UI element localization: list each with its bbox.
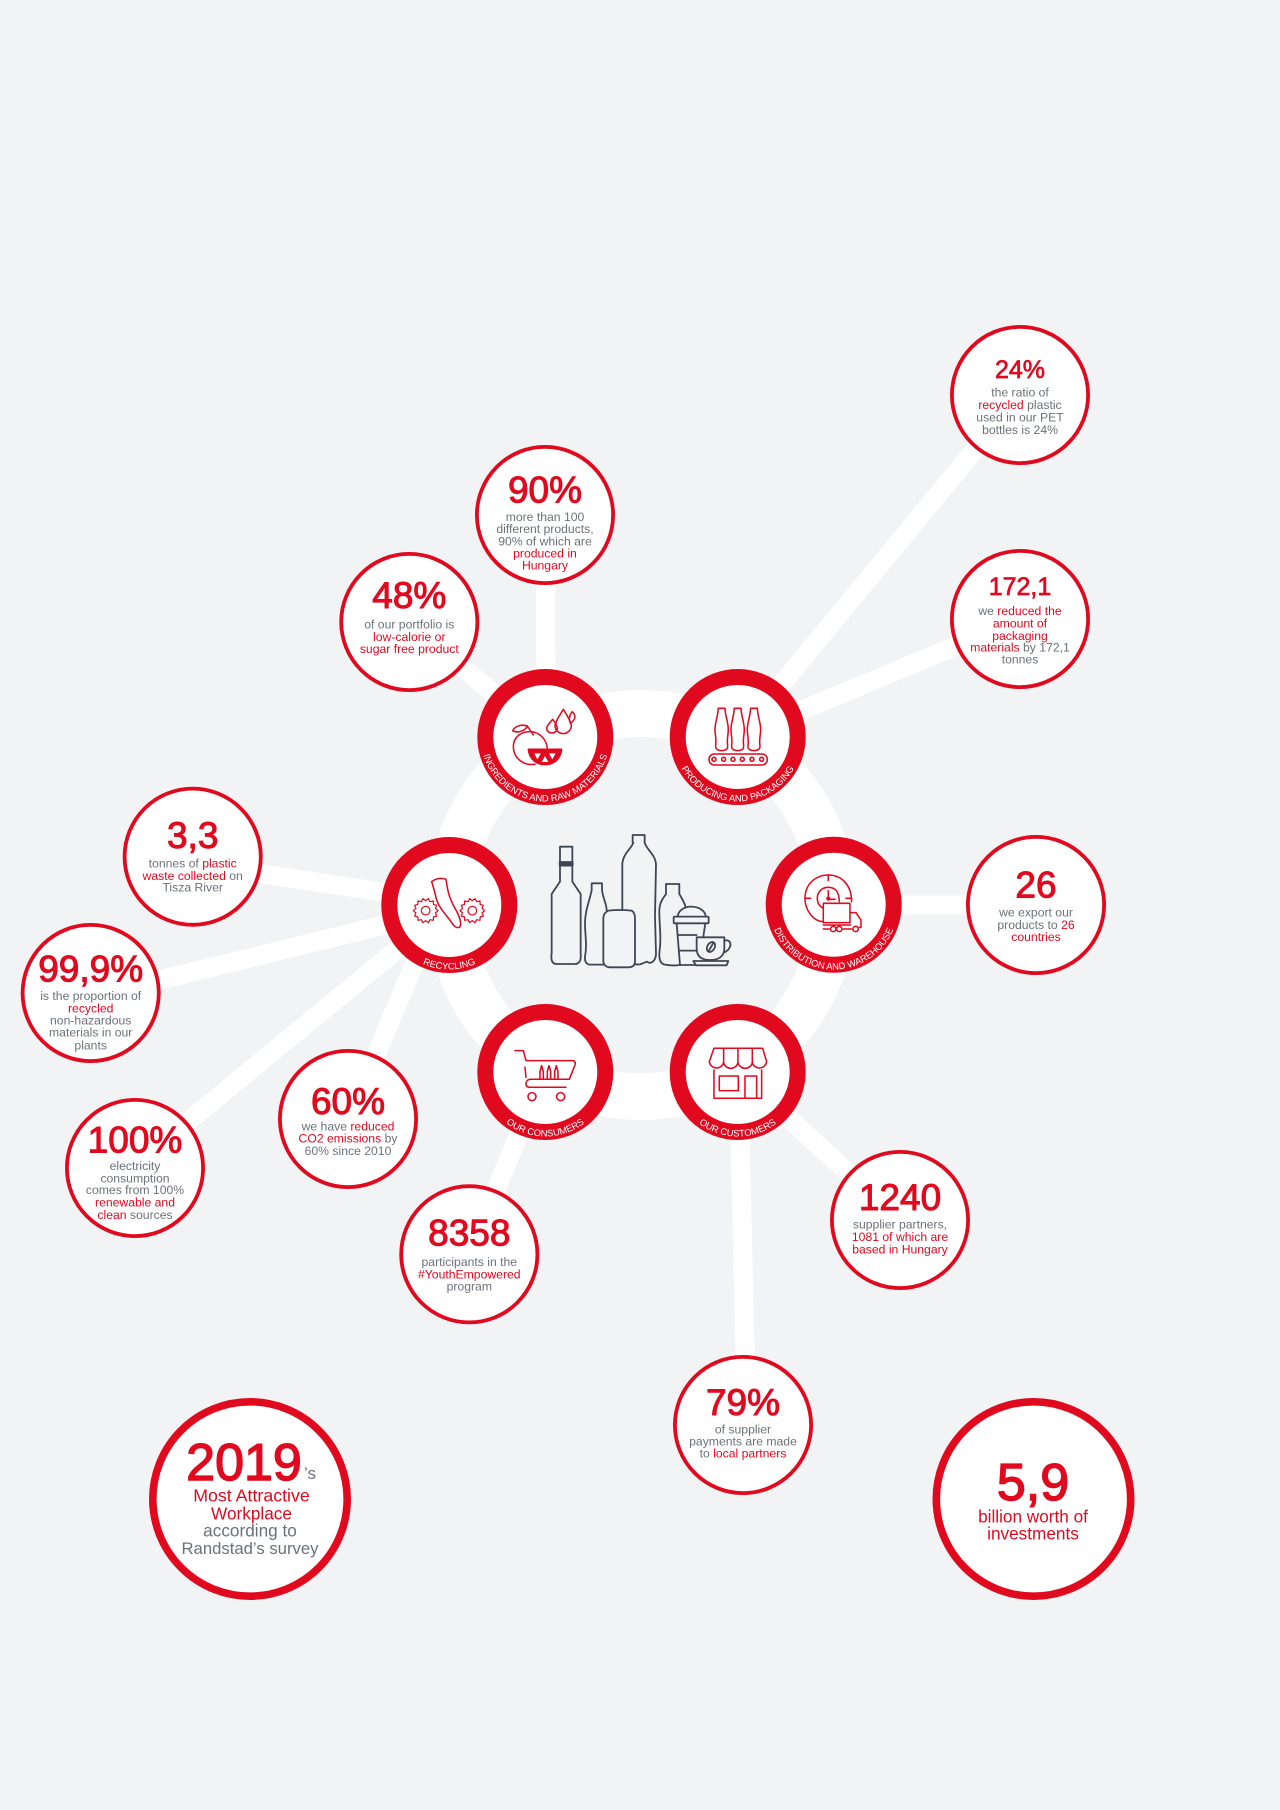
stat: 8358: program <box>447 1280 492 1294</box>
hub: ingredients and raw materials <box>477 669 614 805</box>
stat: 90%: 90% of which are <box>498 534 592 548</box>
stat: 99,9%: plants <box>74 1038 107 1052</box>
stat: 3,3: tonnes of plastic <box>149 856 237 870</box>
stat: 26: 26 <box>1015 865 1057 906</box>
stat: 1240: supplier partners, <box>853 1218 947 1232</box>
stat: 99,9%: recycled <box>68 1001 113 1015</box>
stat: 90%: Hungary <box>522 558 569 572</box>
stat: 100%: 100% <box>88 1120 182 1161</box>
connector lines <box>91 395 1036 1425</box>
icon: clock and truck <box>805 875 861 932</box>
hub: our consumers <box>477 1004 614 1140</box>
stat: 79%: to local partners <box>700 1447 786 1461</box>
stat: 99,9%: 99,9% <box>38 949 143 990</box>
callout: 5,9 billion investments: investments <box>987 1523 1079 1543</box>
hub: producing and packaging <box>670 669 806 805</box>
stat: 24%: used in our PET <box>976 411 1064 425</box>
stat: 90% <box>477 447 613 583</box>
callout: 2019 most attractive workplace: Workplace <box>211 1503 292 1523</box>
stat: 172,1: packaging <box>992 629 1048 643</box>
stat: 172,1: tonnes <box>1002 652 1038 666</box>
icon: bottles on conveyor <box>709 708 767 765</box>
hub: ingredients and raw materials: INGREDIENTS AND RAW MATERIALS <box>484 754 607 802</box>
callout: 2019 most attractive workplace: according to <box>203 1521 297 1541</box>
hub: distribution and warehouse: DISTRIBUTION AND WAREHOUSE <box>774 927 894 970</box>
stat: 1240: 1081 of which are <box>852 1230 948 1244</box>
stat: 79%: 79% <box>706 1382 780 1423</box>
callout: 5,9 billion investments <box>936 1402 1131 1596</box>
stat: 100%: consumption <box>100 1171 170 1185</box>
stat: 48%: sugar free product <box>360 642 459 656</box>
stat: 100% <box>67 1100 203 1236</box>
stat: 26 <box>968 837 1104 973</box>
icon: fruit and drops <box>513 709 575 765</box>
stat: 99,9% <box>23 925 159 1061</box>
icon: shopping cart <box>515 1051 575 1101</box>
hub: our customers <box>670 1004 806 1140</box>
hub: distribution and warehouse <box>766 836 902 973</box>
stat: 1240 <box>832 1152 968 1288</box>
stat: 8358: #YouthEmpowered <box>418 1268 521 1282</box>
hub: recycling: RECYCLING <box>423 958 475 970</box>
stat: 100%: renewable and <box>95 1195 175 1209</box>
stat: 90%: different products, <box>496 522 594 536</box>
stat: 48%: low-calorie or <box>373 630 446 644</box>
stat: 24%: recycled plastic <box>978 398 1062 412</box>
stat: 24% <box>952 327 1088 463</box>
central white ring <box>450 714 833 1096</box>
stat: 79%: payments are made <box>689 1435 797 1449</box>
stat: 172,1: amount of <box>993 616 1048 630</box>
stat: 24%: the ratio of <box>991 386 1049 400</box>
stat: 24%: bottles is 24% <box>982 423 1058 437</box>
stat: 90%: more than 100 <box>506 510 585 524</box>
hub: our customers: OUR CUSTOMERS <box>700 1119 776 1136</box>
stat: 3,3 <box>125 789 261 925</box>
stat: 8358: 8358 <box>428 1213 510 1254</box>
stat: 8358 <box>401 1186 537 1322</box>
callout: 2019 most attractive workplace: Randstad’s survey <box>182 1539 319 1558</box>
hub: producing and packaging: PRODUCING AND PACKAGING <box>682 766 793 802</box>
callout: 2019 most attractive workplace: ’s <box>304 1464 316 1483</box>
stat: 1240: based in Hungary <box>852 1242 949 1256</box>
stat: 100%: comes from 100% <box>86 1183 184 1197</box>
stat: 172,1: we reduced the <box>977 604 1062 618</box>
stat: 99,9%: materials in our <box>49 1026 132 1040</box>
stat: 1240: 1240 <box>859 1177 941 1218</box>
callout: 5,9 billion investments: billion worth of <box>978 1506 1088 1526</box>
stat: 48% <box>341 554 477 690</box>
stat: 26: we export our <box>998 906 1073 920</box>
stat: 172,1: materials by 172,1 <box>970 641 1070 655</box>
central icon: bottles, can and cups <box>551 835 730 967</box>
stat: 79%: of supplier <box>715 1422 771 1436</box>
stat: 99,9%: non-hazardous <box>50 1014 131 1028</box>
stat: 60%: 60% since 2010 <box>305 1144 392 1158</box>
stat: 90%: 90% <box>508 470 582 511</box>
stat: 24%: 24% <box>995 356 1045 384</box>
stat: 3,3: 3,3 <box>167 815 218 856</box>
icon: bottle between gears <box>413 878 485 928</box>
stat: 99,9%: is the proportion of <box>40 989 142 1003</box>
stat: 3,3: waste collected on <box>142 869 243 883</box>
stat: 26: products to 26 <box>997 918 1075 932</box>
stat: 26: countries <box>1011 930 1061 944</box>
stat: 8358: participants in the <box>422 1255 517 1269</box>
hub: our consumers: OUR CONSUMERS <box>507 1118 584 1136</box>
stat: 79% <box>675 1357 811 1493</box>
stat: 60%: CO2 emissions by <box>299 1132 398 1146</box>
stat: 100%: clean sources <box>97 1208 173 1222</box>
callout: 2019 most attractive workplace: Most Attractive <box>193 1486 310 1506</box>
callout: 2019 most attractive workplace <box>153 1402 347 1596</box>
stat: 60% <box>280 1051 416 1187</box>
stat: 90%: produced in <box>513 546 577 560</box>
callout: 2019 most attractive workplace: 2019 <box>186 1434 302 1492</box>
callout: 5,9 billion investments: 5,9 <box>997 1454 1069 1512</box>
icon: storefront <box>709 1048 767 1098</box>
stat: 172,1: 172,1 <box>989 573 1051 601</box>
stat: 60%: we have reduced <box>301 1120 394 1134</box>
stat: 48%: 48% <box>372 575 446 616</box>
stat: 3,3: Tisza River <box>162 881 223 895</box>
stat: 60%: 60% <box>311 1081 385 1122</box>
stat: 172,1 <box>952 551 1088 687</box>
stat: 100%: electricity <box>110 1159 161 1173</box>
hub: recycling <box>381 837 518 973</box>
stat: 48%: of our portfolio is <box>364 618 454 632</box>
